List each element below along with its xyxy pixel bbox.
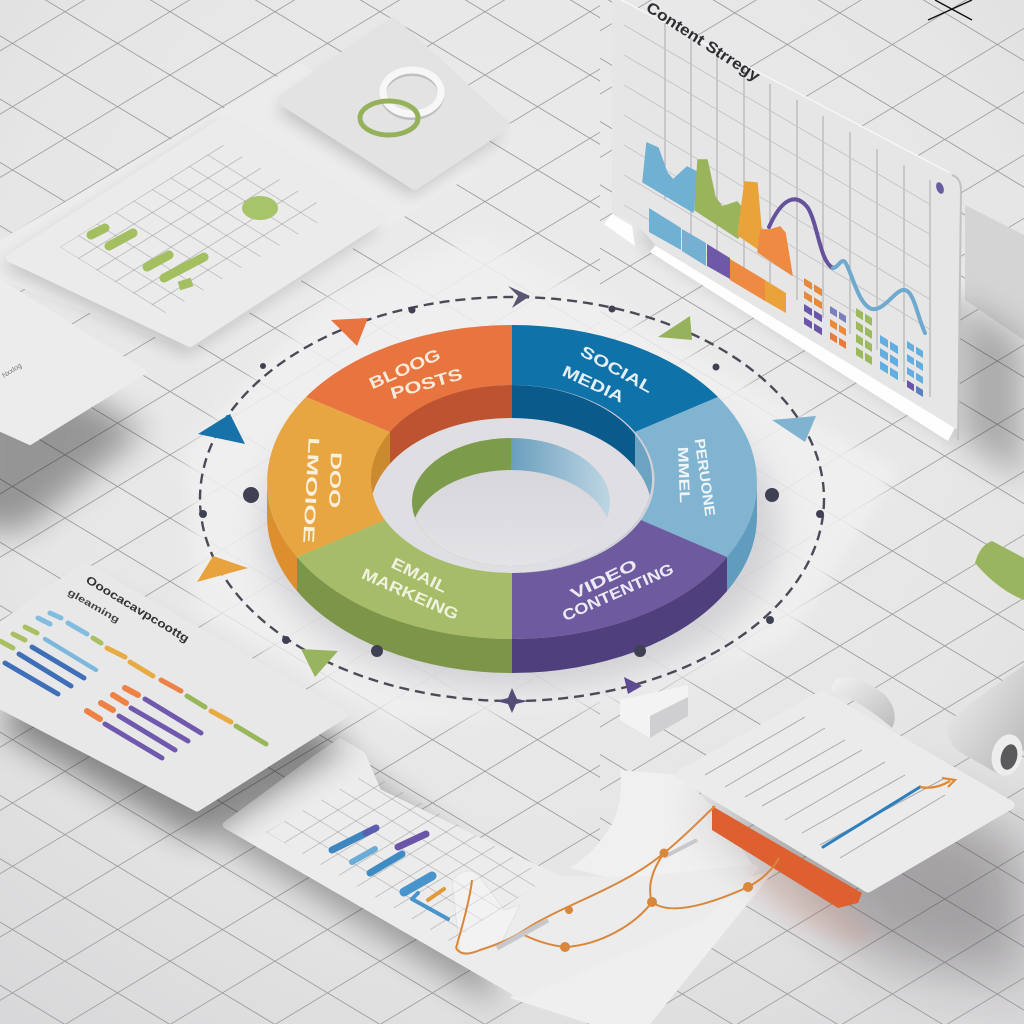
orange block <box>712 806 862 908</box>
arrow: yellow <box>197 556 248 582</box>
area: orange <box>758 227 792 275</box>
green bars <box>91 228 204 286</box>
panel: document card with orange block <box>680 695 1024 980</box>
white sheet with curved edge <box>570 770 755 885</box>
side: green <box>297 557 512 673</box>
line: purple to blue curve <box>769 199 925 333</box>
syringe <box>497 920 548 948</box>
label: video content: VIDEO <box>568 557 640 603</box>
mini bars <box>804 278 923 397</box>
label: social media: SOCIAL <box>577 343 656 397</box>
segment: blog posts <box>306 325 512 432</box>
side: light blue <box>727 482 757 591</box>
small centre well <box>412 438 610 566</box>
pill object <box>832 678 895 728</box>
arrow: blue <box>198 414 245 444</box>
orange wire with knots <box>456 806 779 954</box>
title: Content Strregy <box>643 0 763 85</box>
segment: video content <box>512 520 727 639</box>
panel: bottom grid card <box>210 742 775 1024</box>
panel: rings card <box>276 22 505 195</box>
label: email marketing <box>359 555 461 624</box>
icon: white ring <box>383 73 441 117</box>
green tab <box>975 541 1024 600</box>
dots <box>199 306 824 657</box>
orange arrow <box>920 778 955 788</box>
paper roll <box>947 665 1024 779</box>
dashed orbit ring <box>200 297 824 701</box>
panel: big content strategy chart <box>604 0 1024 480</box>
arrow: purple <box>624 677 642 694</box>
base lip <box>604 214 958 441</box>
text lines <box>705 717 945 858</box>
stacked blocks <box>649 208 786 313</box>
label: yellow segment: LMOIOE <box>299 437 322 544</box>
segment: email marketing <box>297 520 512 639</box>
arrow: green bottom left <box>301 649 338 677</box>
panel: small grid chart card <box>1 120 380 355</box>
small white block <box>620 685 688 738</box>
donut diagram <box>262 325 778 690</box>
green dot <box>242 196 278 220</box>
icon: green ring <box>360 101 418 135</box>
label: personal mail: MMEL <box>674 447 692 503</box>
pin <box>935 181 945 195</box>
donut shadow <box>262 370 778 690</box>
segment: personal mail <box>635 397 757 557</box>
label: yellow segment <box>299 437 344 544</box>
mini grid <box>266 772 548 942</box>
label: blog posts <box>367 346 465 403</box>
label: email marketing: MARKEING <box>359 566 461 624</box>
sub heading: gleaming <box>66 587 121 626</box>
panel: process document card <box>0 566 347 840</box>
sheet under the top left card <box>0 63 480 350</box>
label: social media <box>559 343 656 407</box>
heading: Ooocacavpcoottg <box>83 574 191 645</box>
label: personal mail: PERUONE <box>691 438 717 518</box>
label: social media: MEDIA <box>559 363 627 407</box>
segment: social media <box>512 325 718 432</box>
label: blog posts: POSTS <box>389 365 465 403</box>
arrow: top <box>508 286 530 308</box>
area: blue <box>643 143 697 212</box>
area: green <box>695 160 742 238</box>
inner hole <box>371 385 652 573</box>
blue trend line <box>823 787 920 847</box>
soft panel sheet behind the ring <box>185 235 900 725</box>
arrow: light blue <box>772 416 816 442</box>
small caption: Nxxlog <box>1 362 23 380</box>
area: yellow <box>738 182 763 252</box>
label: yellow segment: DOO <box>325 452 344 508</box>
arrow: orange <box>331 318 368 346</box>
label: email marketing: EMAIL <box>388 555 450 597</box>
bars <box>0 613 266 758</box>
orbit markers <box>197 286 824 713</box>
grid lines <box>60 145 334 313</box>
segment: yellow <box>267 397 390 557</box>
panel: left partial card <box>0 275 145 530</box>
label: blog posts: BLOOG <box>367 346 443 393</box>
lower sheet <box>510 870 775 1024</box>
side: purple <box>512 557 727 673</box>
chart grid <box>624 23 931 397</box>
knots <box>560 848 753 952</box>
bars <box>332 828 448 919</box>
arrow: green top right <box>658 316 692 340</box>
arrow: bottom star <box>496 688 528 713</box>
label: video content: CONTENTING <box>560 561 676 625</box>
label: personal mail <box>674 438 717 518</box>
transparent wrap <box>452 871 520 955</box>
side: yellow <box>267 482 297 591</box>
